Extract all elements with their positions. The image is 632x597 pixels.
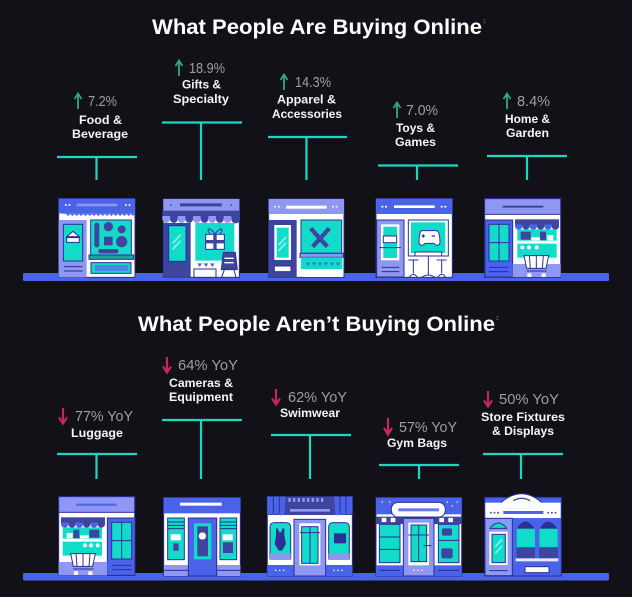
label: Accessories [272,109,342,121]
value: 14.3% [295,74,331,91]
category: Cameras & Equipment [162,357,242,479]
label: Games [395,137,436,149]
category: Food & Beverage [57,93,137,180]
storefront: cameras [164,498,240,576]
label: Swimwear [280,408,341,420]
value: 50% YoY [499,391,559,408]
connector [378,166,458,180]
label [505,114,550,140]
category: Luggage [57,408,137,479]
category: Gym Bags [379,418,459,479]
ground bar: bottom row [23,573,609,580]
category: Toys & Games [378,102,458,180]
connector [57,157,137,180]
value: 64% YoY [178,357,238,374]
connector [57,454,137,479]
connector [379,465,459,479]
connector [162,122,242,180]
category: Store Fixtures & Displays [481,391,565,479]
label: Home & [505,114,550,126]
label: Gifts & [182,80,221,92]
arrow up [280,74,288,90]
category: Apparel & Accessories [268,74,347,180]
label: Luggage [71,428,123,440]
label: Apparel & [277,94,336,106]
connector [487,156,567,180]
value: 18.9% [189,60,225,77]
label: Store Fixtures [481,412,565,424]
value: 8.4% [517,93,550,110]
arrow down [163,357,171,372]
title: what people are buying online: What People Are Buying Online [152,16,482,39]
arrow down [384,418,392,434]
arrow down [272,389,280,404]
label [395,123,436,149]
storefront: apparel [269,199,344,277]
footnote marker 2: 2 [496,316,499,322]
arrow down [484,391,492,406]
connector [268,137,347,180]
label: & Displays [492,426,554,438]
ground bar: top row [23,273,609,281]
arrow up [176,60,182,76]
label [173,80,230,106]
category: Gifts & Specialty [162,60,242,180]
storefront: luggage [59,497,135,575]
storefront: gym bags [376,498,462,576]
value: 77% YoY [75,408,133,425]
label: Cameras & [169,378,233,390]
label: Equipment [169,392,233,404]
category: Home & Garden [487,93,567,180]
storefront: gifts [162,199,240,277]
connector [271,435,351,479]
arrow up [504,94,510,109]
arrow up [394,102,400,118]
label: Beverage [72,129,128,141]
storefront: home [485,199,561,277]
footnote marker 1: 1 [483,19,486,25]
value: 7.2% [88,93,117,110]
storefront: toys [376,199,452,277]
value: 7.0% [406,102,438,119]
label [272,94,342,121]
storefront: swimwear [267,497,352,576]
arrow up [74,94,82,109]
value: 62% YoY [288,389,347,406]
label [481,412,565,438]
label [72,115,128,141]
title: what people aren't buying online: What People Aren’t Buying Online [138,313,495,336]
label: Toys & [396,123,435,135]
connector [483,454,563,479]
storefront: store fixtures [485,494,561,576]
connector [162,420,242,479]
label [169,378,233,404]
value: 57% YoY [399,419,457,436]
category: Swimwear [271,389,351,479]
storefront: food [59,199,135,277]
label: Specialty [173,94,230,106]
label: Food & [79,115,122,127]
arrow down [59,408,67,424]
label: Gym Bags [387,438,447,450]
label: Garden [506,128,549,140]
